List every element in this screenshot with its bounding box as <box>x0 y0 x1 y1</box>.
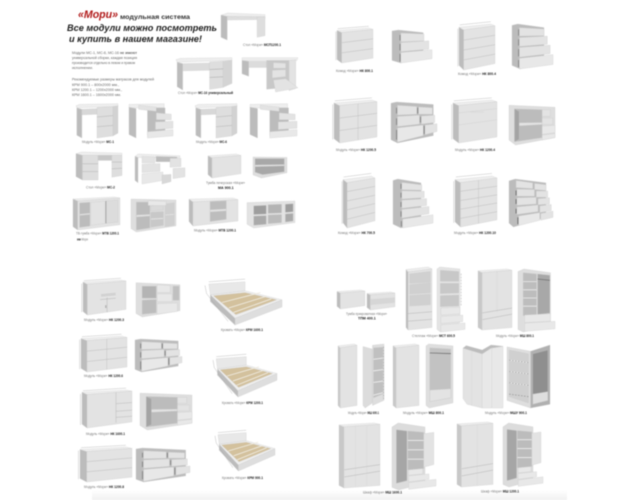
icon: open <box>518 269 555 332</box>
icon: cabinet open <box>253 157 287 178</box>
caption: Кровать «Мори» КРМ 1200.1 <box>222 401 263 405</box>
icon: desk open <box>250 104 297 138</box>
icon: closed <box>78 445 132 482</box>
caption: Модуль «Мори» МШУ 900.1 <box>485 411 527 415</box>
chest НК 1200.10 <box>454 173 553 235</box>
bed КРМ 1200.1 <box>213 354 277 405</box>
icon: TV unit open <box>131 199 176 232</box>
text block: description <box>72 51 154 97</box>
icon: plain desk <box>221 13 265 40</box>
wardrobe МШ 800.1 with rod <box>393 344 453 415</box>
desk МС-1 <box>76 104 173 144</box>
text block: description: КРМ 900.1 – 800х2000 мм., <box>72 83 119 87</box>
caption: Модуль «Мори» НК 1200.4 <box>455 148 495 152</box>
icon: open <box>507 345 550 408</box>
icon: cabinet closed <box>208 154 241 178</box>
icon: open <box>392 423 436 490</box>
bookcase МСТ 600.5 <box>406 267 465 338</box>
icon: open <box>509 179 553 227</box>
caption: Шкаф «Мори» МШ 1200.1 <box>481 490 519 494</box>
panel: top-right chests of drawers <box>333 22 555 235</box>
text block: description: Рекомендуемые размеры матрасов для модулей <box>72 78 154 82</box>
caption: Кровать «Мори» КРМ 900.1 <box>222 476 263 480</box>
text block: description: КРМ 1200.1 – 1200х2000 мм., <box>72 88 122 92</box>
desk МСП 1200.1 <box>221 13 281 47</box>
caption: Стол «Мори» МС-2 <box>86 186 115 190</box>
icon: open <box>426 344 453 408</box>
bed КРМ 900.1 <box>215 430 275 480</box>
caption: Модуль «Мори» МШ 800.1 <box>496 334 534 338</box>
icon: open <box>140 393 192 430</box>
chest НК 1200.5 <box>333 98 437 152</box>
desk МС-2 <box>76 152 185 190</box>
module НК 1200.6 <box>80 334 182 378</box>
icon: desk open <box>242 58 298 92</box>
module НК 1200.3 <box>82 278 180 322</box>
icon: closed <box>80 334 127 372</box>
icon: open <box>367 292 395 310</box>
chest НК 800.1 <box>336 26 432 73</box>
icon: open <box>136 448 190 482</box>
icon: closed <box>336 26 373 63</box>
footnote: мм Мори <box>77 238 88 242</box>
TV unit МТВ 1200.1 <box>73 197 176 236</box>
desk МС-6 <box>195 104 297 144</box>
caption: Модуль «Мори» НК 1600.1 <box>86 432 125 436</box>
desk МС-16 <box>176 58 298 95</box>
panel: top-left desks and header <box>67 9 298 242</box>
chest НК 700.5 <box>338 173 433 235</box>
caption: Модуль «Мори» МС-1 <box>82 140 114 144</box>
panel: bottom-left modules and beds <box>78 278 282 489</box>
icon: closed <box>393 344 419 408</box>
icon: desk open <box>135 154 185 184</box>
title: «Мори» <box>78 9 118 21</box>
caption: Модуль «Мори» МШ 600.1 <box>348 411 379 415</box>
icon: open <box>503 423 543 487</box>
icon: closed <box>463 345 503 408</box>
caption: Стеллаж «Мори» МСТ 600.5 <box>412 334 455 338</box>
icon: open <box>363 344 384 408</box>
icon: open <box>136 283 180 317</box>
icon: closed <box>457 422 493 487</box>
caption: Тумба прикроватная «Мори» <box>346 312 387 316</box>
icon: open <box>135 339 182 372</box>
caption: Кровать «Мори» КРМ 1600.1 <box>221 328 263 332</box>
icon: closed <box>452 98 497 143</box>
icon: open <box>509 105 555 145</box>
caption: Стол «Мори» МСП1200.1 <box>243 43 281 47</box>
icon: open <box>392 30 432 63</box>
caption: Комод «Мори» НК 800.4 <box>458 72 496 76</box>
icon: closed <box>342 173 375 228</box>
text block: description: исполнении. <box>72 66 93 70</box>
icon: closed <box>339 423 380 488</box>
icon: bed <box>215 430 275 471</box>
icon: closed <box>82 278 126 315</box>
chest НК 800.4 <box>458 22 553 76</box>
title: модульная система <box>120 14 191 21</box>
icon: closed <box>406 267 432 330</box>
icon: closed <box>337 290 365 309</box>
heading <box>67 22 217 44</box>
module НК 1600.1 <box>80 388 192 436</box>
caption: Стол «Мори» МС-16 универсальный <box>178 91 233 95</box>
icon: open <box>437 267 465 332</box>
caption: Модуль «Мори» НК 1200.5 <box>336 148 376 152</box>
icon: module open <box>247 201 295 228</box>
bedside table ТПМ 400.1 <box>337 290 395 316</box>
wardrobe МШ 1200.1 <box>457 422 543 494</box>
icon: desk closed <box>195 104 237 138</box>
text block: description: Модули МС-1, МС-6, МС-16 не имеют <box>72 51 137 55</box>
caption: Модуль «Мори» НК 1200.8 <box>84 485 124 489</box>
module МТВ 1200.1 <box>189 198 295 232</box>
icon: closed <box>454 173 497 227</box>
icon: desk open <box>129 104 173 138</box>
caption: Комод «Мори» НК 700.5 <box>338 231 375 235</box>
title <box>78 9 191 21</box>
icon: TV unit closed <box>73 197 120 230</box>
panel: bottom-right wardrobes <box>337 267 555 494</box>
caption line 2: ТПМ 400.1 <box>358 316 376 320</box>
caption: Модуль «Мори» НК 1200.6 <box>84 374 123 378</box>
icon: bed <box>205 279 282 325</box>
wardrobe МШ 600.1 <box>338 344 384 415</box>
caption: Модуль «Мори» НК 1200.10 <box>454 231 496 235</box>
icon: desk closed <box>76 104 118 138</box>
icon: closed <box>80 388 132 428</box>
caption: Модуль «Мори» МШ 800.1 <box>403 411 444 415</box>
caption: Тумба печерская «Мори» <box>206 181 245 185</box>
text block: description: КРМ 1600.1 – 1600х2000 мм. <box>72 93 121 97</box>
icon: closed <box>338 344 357 408</box>
icon: closed <box>458 22 495 70</box>
icon: closed <box>333 98 377 143</box>
background shade at bottom <box>92 490 567 500</box>
caption: Модуль «Мори» МС-6 <box>196 140 227 144</box>
icon: module closed <box>189 198 238 226</box>
icon: open <box>512 24 553 69</box>
wardrobe МШ 1600.1 <box>339 423 436 494</box>
nightstand МА 900.1 <box>206 154 287 185</box>
module НК 1200.8 <box>78 445 190 489</box>
wardrobe МШ 800.1 <box>478 269 555 338</box>
caption: Модуль «Мори» НК 1200.3 <box>84 318 124 322</box>
caption line 2: МА 900.1 <box>218 186 234 190</box>
bed КРМ 1600.1 <box>205 279 282 332</box>
corner wardrobe МШУ 900.1 <box>463 345 550 415</box>
caption: ТВ-тумба «Мори» МТВ 1200.1 <box>76 232 119 236</box>
caption: Комод «Мори» НК 800.1 <box>336 69 373 73</box>
icon: desk closed <box>176 58 232 90</box>
icon: bed <box>213 354 277 397</box>
icon: closed <box>478 269 512 330</box>
caption: Шкаф «Мори» МШ 1600.1 <box>363 490 402 494</box>
text block: description: производится отдельно в левом и правом <box>72 61 135 65</box>
icon: open <box>391 102 437 143</box>
icon: desk closed <box>76 152 122 180</box>
heading: Все модули можно посмотреть <box>67 22 217 33</box>
chest НК 1200.4 <box>452 98 555 152</box>
icon: open <box>393 179 433 228</box>
caption: Модуль «Мори» МТВ 1200.1 <box>194 228 236 232</box>
text block: description: универсальной сборки, каждая позиция <box>72 56 137 60</box>
heading: и купить в нашем магазине! <box>69 33 202 44</box>
